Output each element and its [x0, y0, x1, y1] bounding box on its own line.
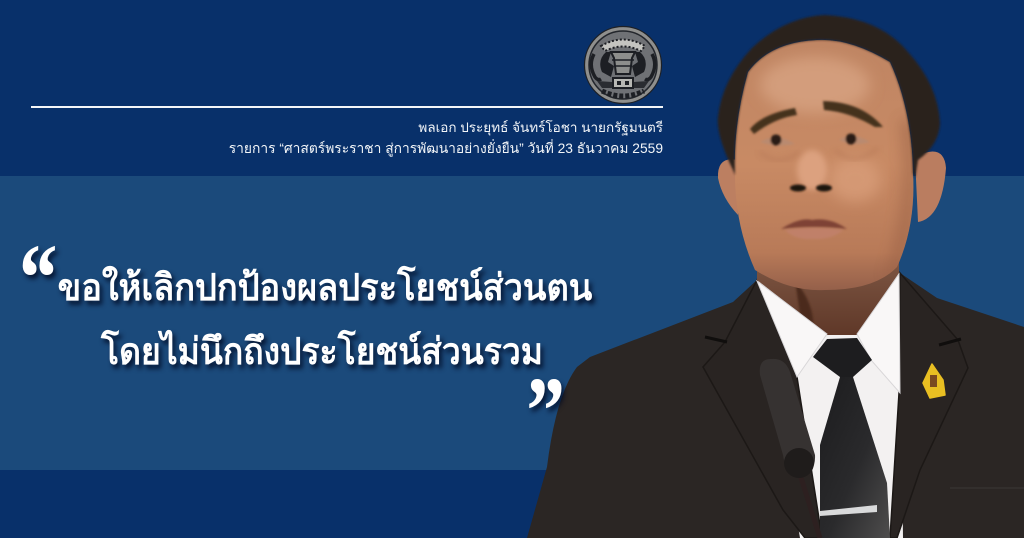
- lapel pin: [923, 364, 945, 398]
- lapel notches: [705, 337, 961, 345]
- text block: speaker and programme: รายการ “ศาสตร์พระราชา สู่การพัฒนาอย่างยั่งยืน” วันที่ 23 ธันวาคม 2559: [229, 141, 663, 156]
- right lapel: [890, 273, 968, 538]
- divider line: [31, 106, 663, 108]
- left ear: [718, 159, 738, 215]
- nostrils: [790, 184, 832, 192]
- hair: [718, 15, 940, 178]
- mouth: [781, 219, 847, 239]
- left lapel: [703, 280, 822, 538]
- white shirt: [757, 273, 903, 538]
- icon: government seal: [584, 26, 662, 104]
- right ear: [915, 152, 946, 222]
- microphone: [760, 359, 820, 538]
- text block: speaker and programme: [229, 120, 663, 157]
- text block: speaker and programme: พลเอก ประยุทธ์ จันทร์โอชา นายกรัฐมนตรี: [418, 120, 663, 135]
- panel: quote band: [0, 176, 1024, 470]
- shirt collar: [757, 274, 900, 393]
- quote line one: ขอให้เลิกปกป้องผลประโยชน์ส่วนตน: [58, 267, 592, 308]
- closing quotation mark: ”: [522, 357, 563, 464]
- quote line two: โดยไม่นึกถึงประโยชน์ส่วนรวม: [101, 331, 543, 372]
- face: [735, 40, 913, 290]
- opening quotation mark: “: [15, 224, 56, 331]
- eyebrows: [750, 101, 883, 134]
- suit jacket: [527, 273, 1024, 538]
- eyes: [760, 134, 870, 146]
- portrait of speaker: [527, 14, 1024, 538]
- neck: [757, 260, 899, 335]
- facial shading: [760, 57, 918, 280]
- necktie: [813, 338, 890, 538]
